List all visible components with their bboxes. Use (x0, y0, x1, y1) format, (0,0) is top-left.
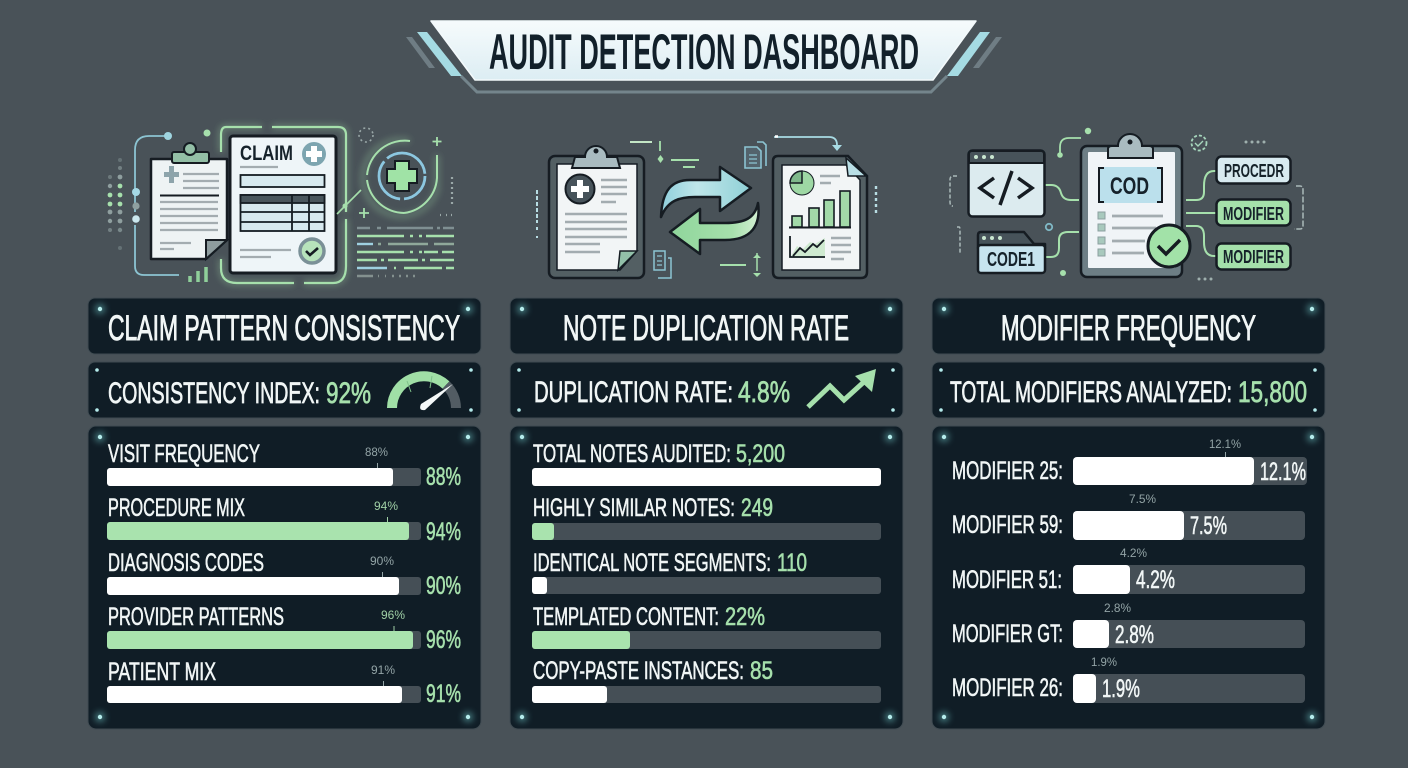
heading: note duplication rate (510, 298, 903, 354)
row: provider patterns: 96% (381, 608, 405, 622)
row: modifier 59: MODIFIER 59: (952, 511, 1063, 539)
row: identical note segments (532, 549, 881, 594)
row: modifier 25 (952, 437, 1307, 486)
row: diagnosis codes (107, 549, 461, 600)
row: total notes audited: 5,200 (736, 440, 785, 468)
row: procedure mix: PROCEDURE MIX (108, 494, 245, 522)
row: modifier 51: 4.2% (1136, 566, 1175, 594)
chart: modifier bars (932, 426, 1325, 729)
icon: code and modifiers (950, 128, 1303, 280)
row: visit frequency: VISIT FREQUENCY (108, 440, 260, 468)
row: highly similar notes: 249 (741, 494, 773, 522)
icon: gauge (392, 376, 456, 410)
panel: claim pattern consistency (88, 298, 481, 729)
row: templated content: TEMPLATED CONTENT: (533, 603, 719, 631)
heading: claim pattern consistency: CLAIM PATTERN CONSISTENCY (108, 309, 460, 348)
row: highly similar notes: HIGHLY SIMILAR NOTES: (533, 494, 735, 522)
row: diagnosis codes: 90% (426, 572, 461, 600)
row: procedure mix: 94% (426, 518, 461, 546)
row: patient mix: 91% (371, 663, 395, 677)
icon: note comparison (537, 136, 876, 278)
row: modifier 26: MODIFIER 26: (952, 674, 1063, 702)
row: procedure mix: 94% (374, 499, 398, 513)
icon: claim documents (108, 127, 454, 283)
row: modifier 51: 4.2% (1120, 546, 1147, 560)
icon: trend arrow (808, 369, 876, 407)
code1 label: CODE1 (987, 249, 1035, 271)
row: copy-paste instances: 85 (750, 657, 773, 685)
row: modifier 59: 7.5% (1190, 512, 1227, 540)
modifier tags: MODIFIER (1223, 247, 1284, 267)
row: highly similar notes (532, 494, 881, 540)
metric: duplication rate: 4.8% (738, 376, 790, 409)
row: modifier 59: 7.5% (1129, 492, 1156, 506)
panel: note duplication rate (510, 298, 903, 729)
row: modifier 51: MODIFIER 51: (952, 566, 1062, 594)
heading: modifier frequency: MODIFIER FREQUENCY (1001, 309, 1256, 348)
metric: total modifiers analyzed (932, 362, 1325, 418)
row: provider patterns: PROVIDER PATTERNS (108, 603, 284, 631)
metric: total modifiers analyzed: 15,800 (1238, 376, 1307, 409)
row: provider patterns: 96% (426, 626, 461, 654)
panel: modifier frequency (932, 298, 1325, 729)
chart: note bars (510, 426, 903, 729)
heading: note duplication rate: NOTE DUPLICATION RATE (563, 309, 849, 348)
row: modifier 26 (952, 655, 1305, 703)
row: total notes audited: TOTAL NOTES AUDITED: (533, 440, 731, 468)
modifier tags (1223, 161, 1284, 267)
row: templated content (532, 603, 881, 649)
modifier tags: MODIFIER (1223, 204, 1284, 224)
row: modifier 26: 1.9% (1091, 655, 1117, 669)
row: procedure mix (107, 494, 461, 546)
row: modifier 25: 12.1% (1209, 437, 1241, 451)
row: modifier 25: 12.1% (1260, 458, 1306, 486)
row: templated content: 22% (725, 603, 765, 631)
row: diagnosis codes: 90% (370, 554, 394, 568)
row: modifier 51 (952, 546, 1305, 594)
row: copy-paste instances (532, 657, 881, 703)
row: diagnosis codes: DIAGNOSIS CODES (108, 549, 264, 577)
heading: claim pattern consistency (88, 298, 481, 354)
row: patient mix (107, 658, 461, 708)
row: provider patterns (107, 603, 461, 654)
row: visit frequency: 88% (365, 445, 388, 459)
chart: consistency bars (88, 426, 481, 729)
metric: consistency index (88, 362, 481, 418)
row: modifier 59 (952, 492, 1305, 540)
row: total notes audited (532, 440, 881, 486)
row: patient mix: PATIENT MIX (108, 658, 216, 686)
metric: total modifiers analyzed: TOTAL MODIFIERS ANALYZED: (950, 376, 1232, 409)
title text: AUDIT DETECTION DASHBOARD (489, 24, 919, 80)
row: modifier gt: 2.8% (1115, 621, 1154, 649)
metric: consistency index: 92% (326, 377, 371, 410)
row: visit frequency (107, 440, 461, 491)
row: modifier 25: MODIFIER 25: (952, 457, 1063, 485)
row: modifier gt: MODIFIER GT: (952, 620, 1063, 648)
row: identical note segments: 110 (777, 549, 807, 577)
metric: consistency index: CONSISTENCY INDEX: (108, 377, 320, 410)
row: copy-paste instances: COPY-PASTE INSTANCES: (533, 657, 744, 685)
row: modifier gt: 2.8% (1104, 601, 1131, 615)
row: identical note segments: IDENTICAL NOTE SEGMENTS: (533, 549, 771, 577)
claim word: CLAIM (240, 142, 293, 165)
metric: duplication rate (510, 362, 903, 418)
title banner (406, 21, 1002, 92)
cod label: COD (1110, 173, 1149, 200)
modifier tags: PROCEDR (1224, 161, 1284, 181)
row: modifier gt (952, 601, 1305, 649)
metric: duplication rate: DUPLICATION RATE: (534, 376, 733, 409)
heading: modifier frequency (932, 298, 1325, 354)
row: visit frequency: 88% (426, 463, 461, 491)
row: patient mix: 91% (426, 680, 461, 708)
row: modifier 26: 1.9% (1102, 675, 1140, 703)
